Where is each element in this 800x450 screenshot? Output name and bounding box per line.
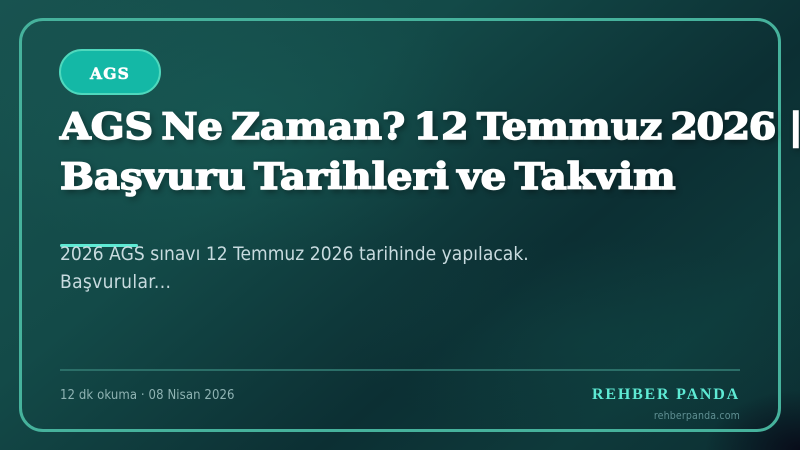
- title: [58, 106, 800, 200]
- description: [60, 243, 529, 293]
- title: AGS Ne Zaman? 12 Temmuz 2026 |: [60, 106, 800, 148]
- description: 2026 AGS sınavı 12 Temmuz 2026 tarihinde yapılacak.: [60, 243, 529, 265]
- title: Başvuru Tarihleri ve Takvim: [60, 156, 676, 198]
- category badge: [59, 49, 161, 95]
- divider: [60, 369, 740, 371]
- category badge: AGS: [90, 64, 130, 83]
- brand name: REHBER PANDA: [592, 386, 740, 403]
- website: rehberpanda.com: [654, 410, 740, 422]
- reading time and date: 12 dk okuma · 08 Nisan 2026: [60, 388, 235, 403]
- accent bar: [60, 244, 138, 247]
- description: Başvurular...: [60, 271, 171, 293]
